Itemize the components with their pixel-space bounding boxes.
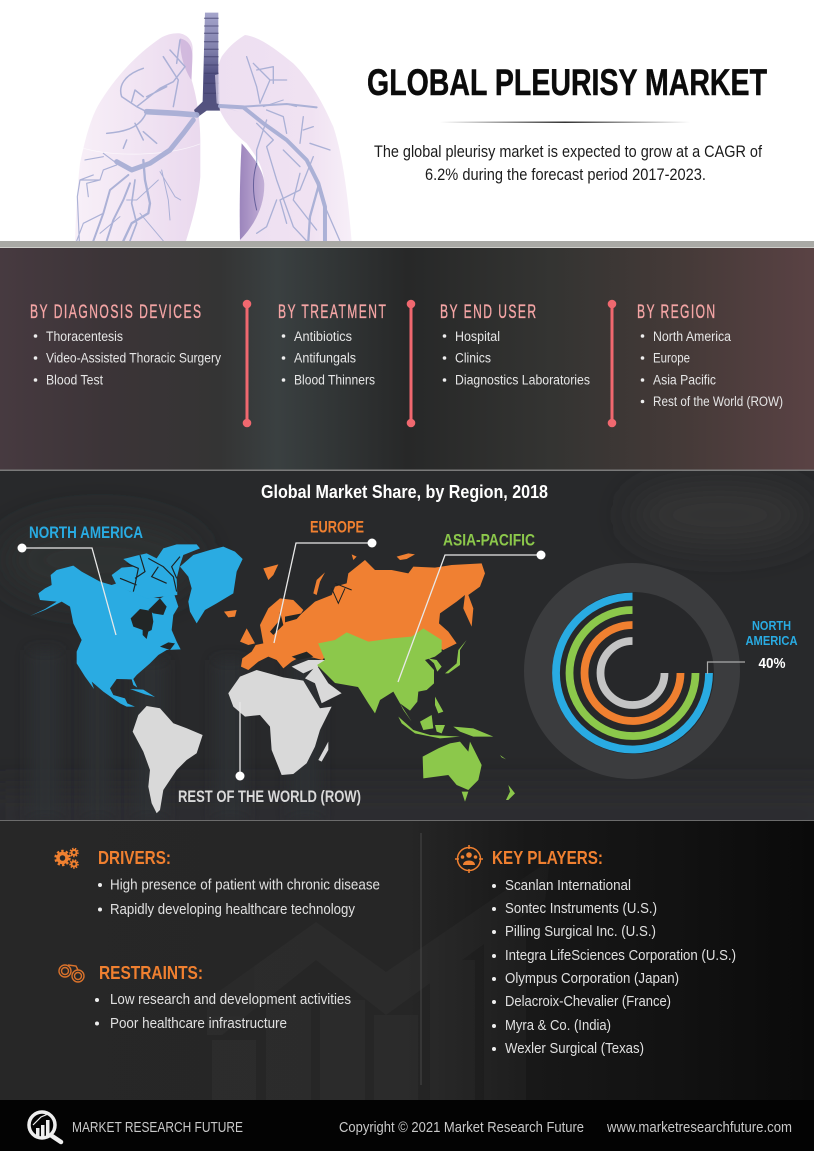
panel: segmentation: [0, 248, 814, 471]
restraints: [59, 962, 351, 1032]
divider: [243, 300, 251, 427]
callout: north america 40%: NORTH: [752, 618, 791, 633]
column: by treatment: BY TREATMENT: [278, 301, 386, 323]
key players: KEY PLAYERS:: [492, 847, 603, 868]
column: by end user: Diagnostics Laboratories: [455, 372, 590, 388]
column: by treatment: Antifungals: [294, 350, 356, 366]
label: europe: [274, 518, 376, 643]
column: by region: Rest of the World (ROW): [653, 394, 783, 409]
lower-left branches: [77, 153, 181, 241]
icon: handcuffs: [59, 965, 84, 982]
label: europe: EUROPE: [310, 518, 364, 536]
key players: Delacroix-Chevalier (France): [505, 994, 671, 1010]
restraints: Poor healthcare infrastructure: [110, 1016, 287, 1032]
label: north america: [18, 524, 143, 635]
label: rest of the world: [178, 702, 361, 806]
key players: Scanlan International: [505, 878, 631, 894]
column: by diagnosis devices: Video-Assisted Thoracic Surgery: [46, 350, 221, 366]
column: by region: [637, 301, 783, 409]
key players: Integra LifeSciences Corporation (U.S.): [505, 948, 736, 964]
callout: north america 40%: [746, 618, 798, 672]
panel: market share map: [0, 471, 814, 835]
column: by diagnosis devices: BY DIAGNOSIS DEVICES: [30, 301, 201, 323]
region: north america: [30, 544, 243, 707]
column: by end user: Hospital: [455, 329, 500, 344]
header panel: [75, 12, 767, 241]
panel: drivers, restraints, key players: [0, 821, 814, 1100]
column: by treatment: [278, 301, 386, 388]
column: by diagnosis devices: [30, 301, 221, 388]
column: by diagnosis devices: Thoracentesis: [46, 329, 123, 344]
column: by end user: [440, 301, 590, 388]
column: by treatment: Blood Thinners: [294, 372, 375, 388]
column: by diagnosis devices: Blood Test: [46, 372, 103, 388]
key players: [455, 845, 736, 1057]
drivers: Rapidly developing healthcare technology: [110, 902, 356, 918]
column: by region: Europe: [653, 350, 690, 366]
key players: Pilling Surgical Inc. (U.S.): [505, 924, 656, 940]
region: rest of the world: [133, 660, 342, 813]
intro text: [374, 143, 762, 184]
logo: [29, 1112, 61, 1142]
key players: Wexler Surgical (Texas): [505, 1041, 644, 1057]
label: rest of the world: REST OF THE WORLD (ROW): [178, 788, 361, 806]
company name: MARKET RESEARCH FUTURE: [72, 1120, 243, 1136]
world map: [30, 544, 515, 813]
column: by end user: Clinics: [455, 350, 491, 366]
label: north america: NORTH AMERICA: [29, 524, 143, 542]
callout: north america 40%: 40%: [758, 656, 786, 672]
restraints: Low research and development activities: [110, 992, 351, 1008]
key players: Myra & Co. (India): [505, 1018, 611, 1034]
icon: key players: [455, 845, 483, 873]
drivers: High presence of patient with chronic disease: [110, 878, 380, 894]
drivers: [56, 847, 380, 918]
column: by region: North America: [653, 329, 731, 344]
icon: gears: [56, 848, 78, 868]
copyright: Copyright © 2021 Market Research Future: [339, 1120, 584, 1136]
region: asia pacific: [317, 628, 515, 802]
website: www.marketresearchfuture.com: [606, 1120, 792, 1136]
label: asia-pacific: [398, 532, 546, 682]
column: by region: Asia Pacific: [653, 372, 716, 388]
key players: Olympus Corporation (Japan): [505, 971, 679, 987]
divider: [407, 300, 415, 427]
divider: [608, 300, 616, 427]
intro text: 6.2% during the forecast period 2017-2023.: [425, 166, 706, 184]
illustration: lungs: [75, 13, 352, 241]
key players: Sontec Instruments (U.S.): [505, 901, 657, 917]
drivers: DRIVERS:: [98, 847, 171, 868]
callout: north america 40%: AMERICA: [746, 633, 798, 648]
intro text: The global pleurisy market is expected to grow at a CAGR of: [374, 143, 762, 161]
radial chart: [524, 563, 745, 779]
label: asia-pacific: ASIA-PACIFIC: [443, 532, 535, 550]
region: europe and russia: [240, 553, 485, 670]
chart title: Global Market Share, by Region, 2018: [261, 482, 548, 502]
column: by end user: BY END USER: [440, 301, 536, 323]
footer: [0, 1100, 814, 1151]
column: by treatment: Antibiotics: [294, 329, 352, 344]
column: by region: BY REGION: [637, 301, 715, 323]
restraints: RESTRAINTS:: [99, 962, 203, 983]
